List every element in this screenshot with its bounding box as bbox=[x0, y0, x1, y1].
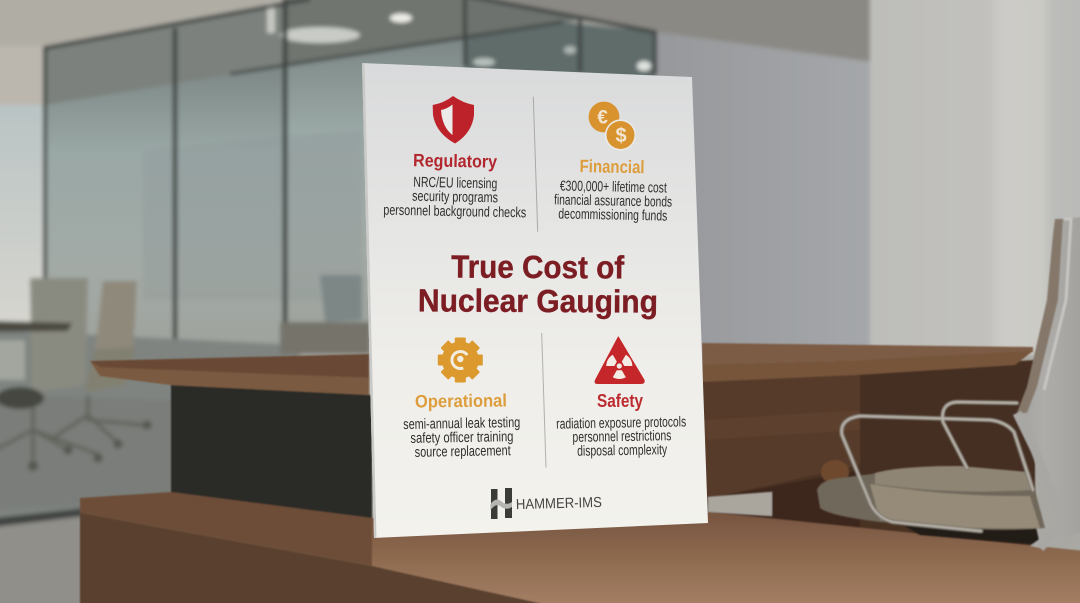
panel: operational bbox=[403, 338, 521, 461]
icon: coins: $ bbox=[615, 125, 627, 147]
divider: top bbox=[533, 97, 538, 232]
panel: regulatory bbox=[383, 96, 527, 221]
panel: financial bbox=[554, 102, 672, 225]
heading: Financial: Financial bbox=[579, 156, 645, 177]
back desk and counter bbox=[80, 343, 1080, 603]
text: regulatory items: NRC/EU licensing bbox=[413, 175, 497, 192]
icon: coins: € bbox=[597, 108, 608, 128]
office chair bbox=[817, 217, 1080, 548]
text: operational items bbox=[403, 415, 521, 461]
text: financial items: €300,000+ lifetime cost bbox=[560, 178, 667, 197]
glass frame bbox=[45, 0, 655, 355]
icon: shield bbox=[433, 96, 474, 144]
heading: Operational: Operational bbox=[415, 390, 507, 412]
text: financial items bbox=[554, 178, 672, 225]
title: Nuclear Gauging bbox=[418, 282, 658, 320]
sign board bbox=[362, 63, 708, 538]
heading: Regulatory: Regulatory bbox=[413, 150, 497, 172]
text: financial items: financial assurance bonds bbox=[554, 192, 672, 211]
text: operational items: safety officer training bbox=[410, 429, 514, 447]
ceiling lights bbox=[280, 27, 360, 43]
text: operational items: semi-annual leak testing bbox=[403, 415, 520, 433]
panel: safety bbox=[556, 337, 687, 460]
title: True Cost of bbox=[451, 249, 625, 285]
blurred meeting room furniture bbox=[30, 278, 88, 392]
text: safety items: disposal complexity bbox=[577, 442, 668, 460]
logo: Hammer-IMS bbox=[490, 488, 602, 519]
text: regulatory items: personnel background checks bbox=[383, 203, 526, 221]
icon: gear bbox=[438, 338, 483, 382]
floor bbox=[0, 330, 300, 525]
heading: Safety: Safety bbox=[597, 391, 643, 411]
text: financial items: decommissioning funds bbox=[558, 206, 667, 225]
text: operational items: source replacement bbox=[415, 443, 511, 461]
divider: bottom bbox=[542, 333, 546, 468]
text: safety items: radiation exposure protocols bbox=[556, 414, 686, 433]
title bbox=[418, 248, 658, 320]
icon: H mark bbox=[490, 488, 512, 519]
text: wordmark: HAMMER-IMS bbox=[516, 495, 602, 513]
text: regulatory items: security programs bbox=[412, 189, 498, 206]
text: regulatory items bbox=[383, 174, 527, 221]
icon: coins bbox=[589, 102, 636, 151]
text: safety items: personnel restrictions bbox=[572, 428, 672, 446]
icon: radiation warning triangle bbox=[595, 337, 644, 384]
text: safety items bbox=[556, 414, 687, 460]
